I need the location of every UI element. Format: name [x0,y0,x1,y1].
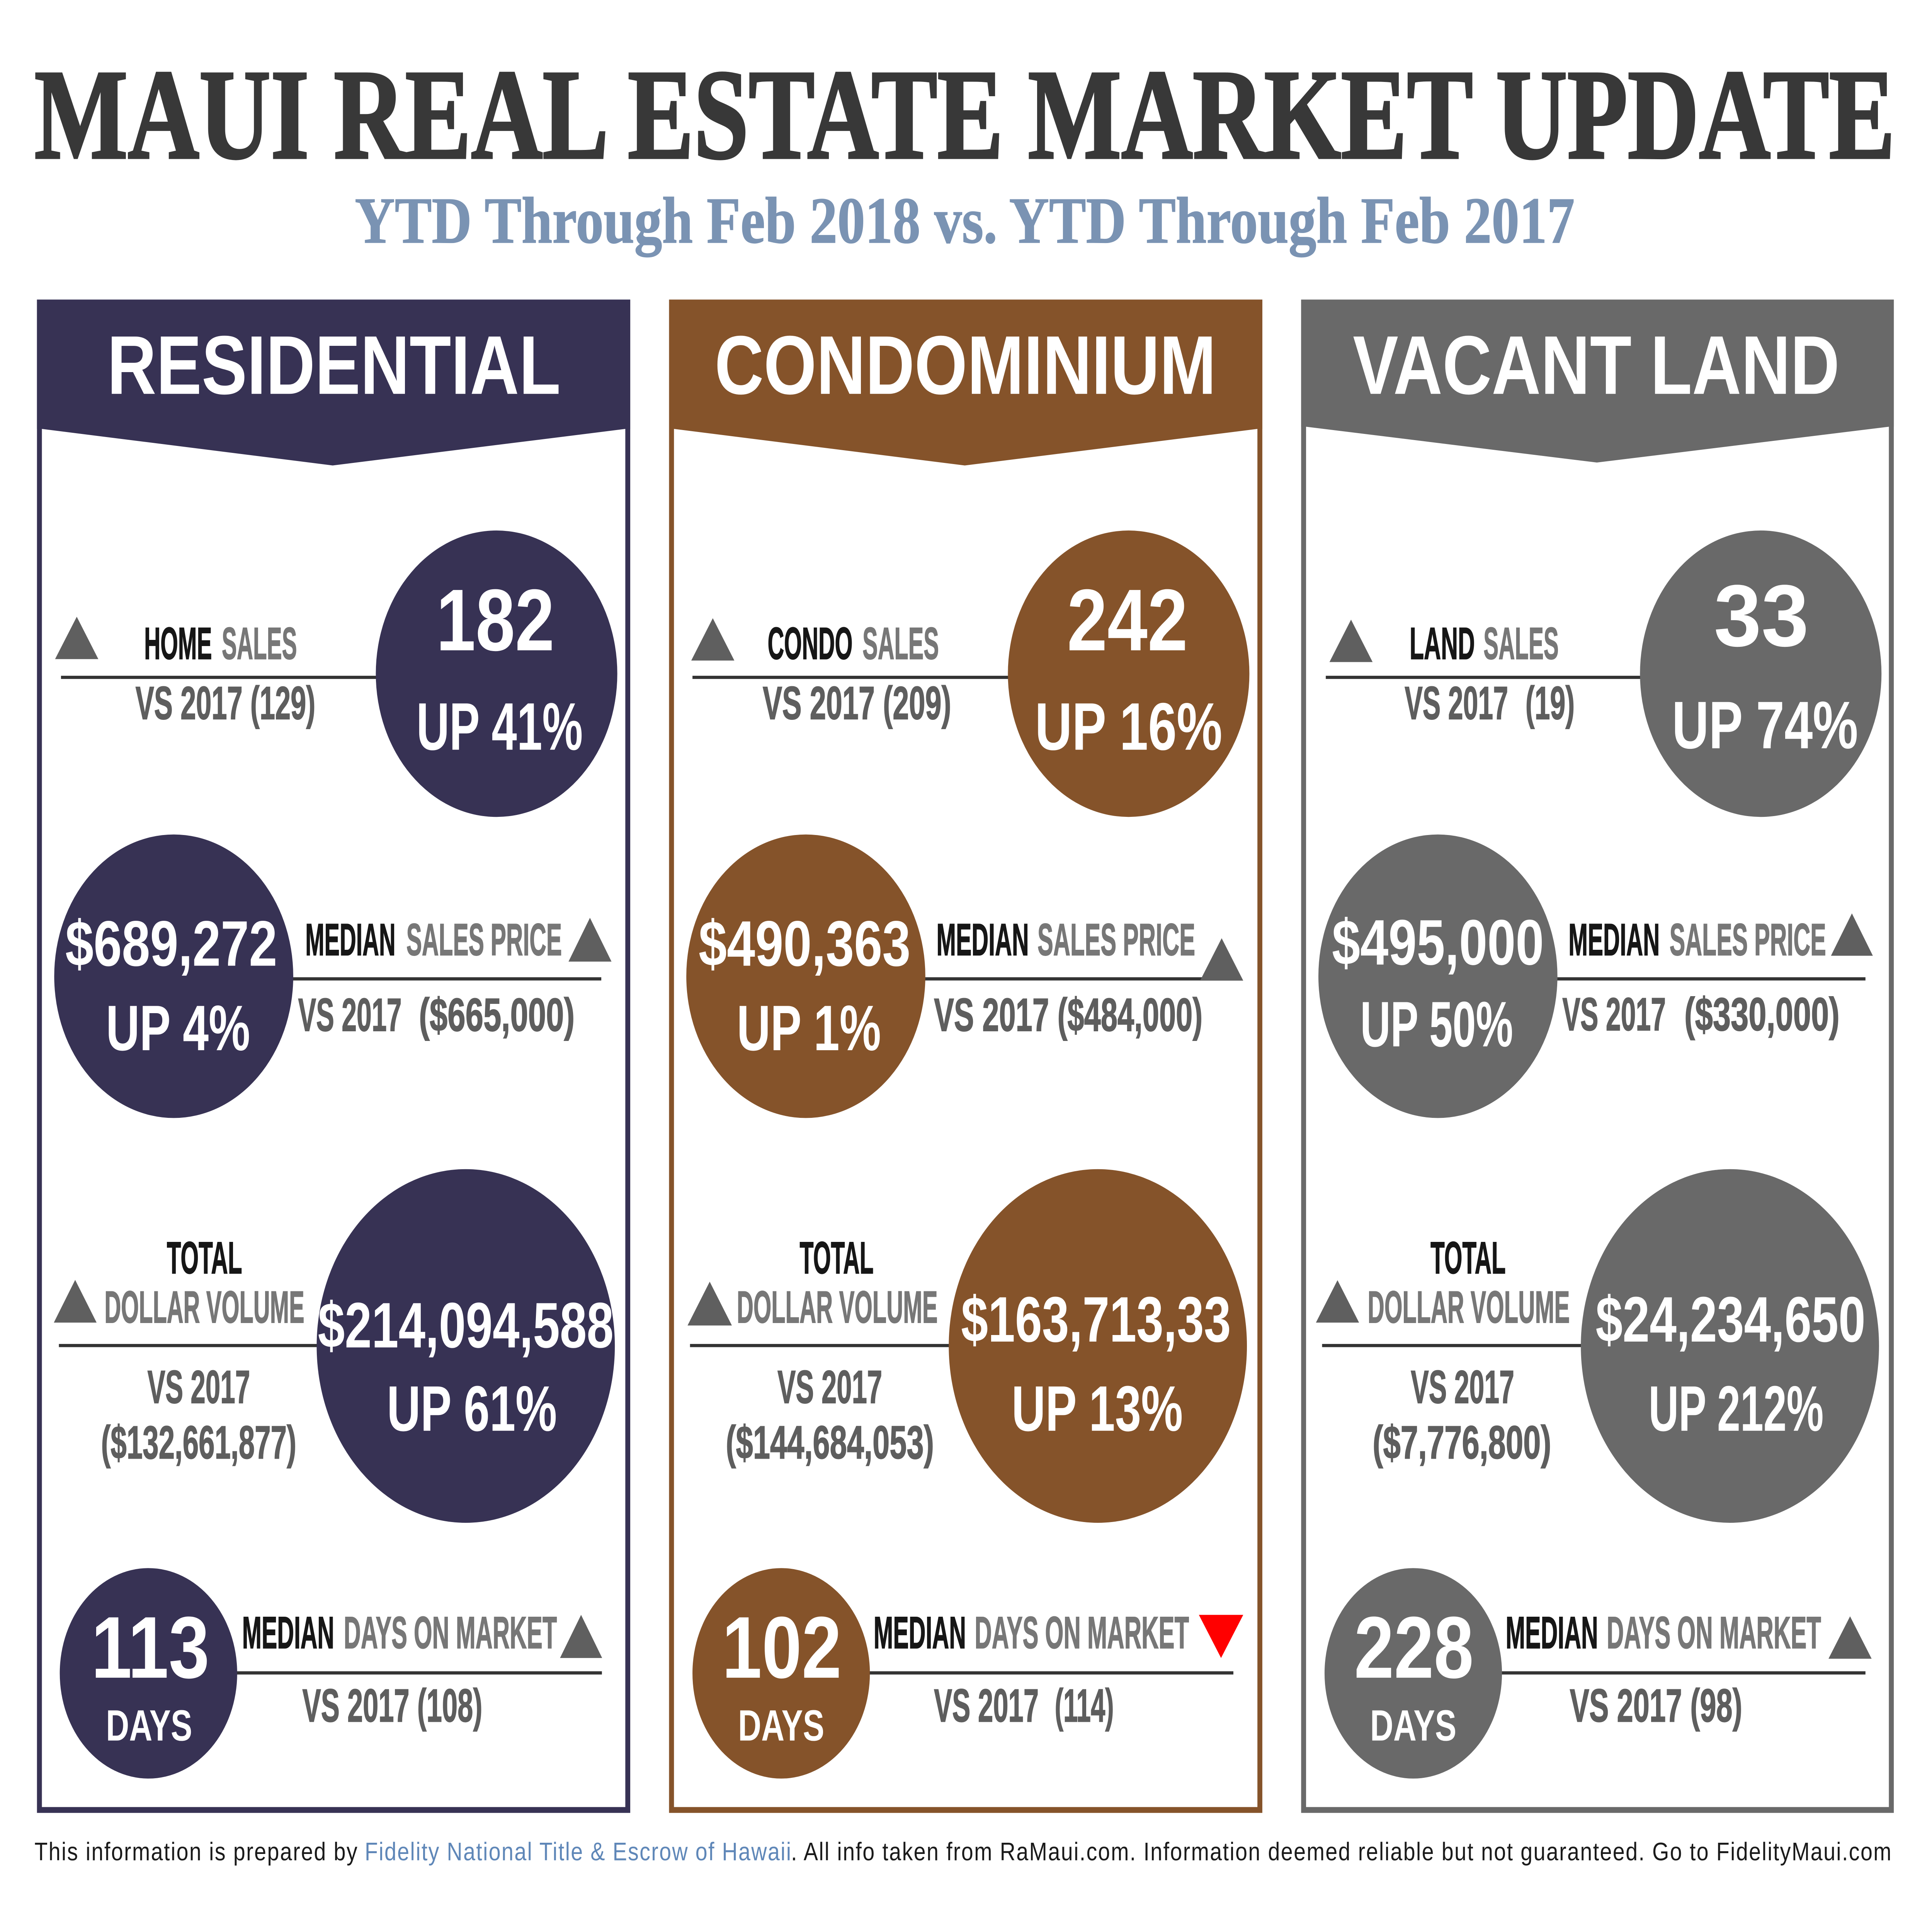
home sales label: SALES [222,618,297,669]
condo sales comparison: VS 2017 (209) [763,677,951,729]
land sales comparison: VS 2017 [1405,677,1508,729]
circle: condo sales [1008,531,1249,817]
home sales label: HOME [144,618,212,669]
circle: total dollar volume: $163,713,33 [961,1284,1231,1355]
total dollar volume label [1368,1232,1570,1332]
dollar volume comparison: VS 2017 [1411,1361,1514,1413]
days on market comparison: VS 2017 (98) [1570,1679,1742,1731]
circle: median sales price: UP 1% [737,992,881,1064]
subtitle: YTD Through Feb 2018 vs. YTD Through Feb 2017 [355,185,1575,257]
days on market comparison: VS 2017 [934,1679,1039,1731]
circle: home sales: UP 41% [417,689,583,764]
icon: up triangle [1200,938,1243,981]
icon: up triangle [687,1282,732,1325]
vacant land header banner [1301,299,1894,463]
median sales price label [1568,914,1826,965]
total dollar volume label: DOLLAR VOLUME [737,1282,938,1332]
days on market comparison: VS 2017 (108) [303,1679,482,1731]
median price comparison [1562,988,1840,1040]
stat: land sales [1326,531,1881,817]
residential heading: RESIDENTIAL [107,319,561,412]
circle: median sales price [54,835,293,1118]
circle: total dollar volume [1581,1169,1879,1523]
circle: land sales [1640,531,1881,817]
condo sales label: SALES [862,618,939,669]
stat: median sales price [1318,835,1873,1118]
median days on market label [874,1607,1189,1658]
circle: days on market: DAYS [106,1701,192,1750]
circle: median sales price: UP 50% [1360,988,1513,1060]
circle: median sales price: $490,363 [699,908,911,980]
stat: median sales price [686,835,1243,1118]
median sales price label: MEDIAN [305,914,396,965]
circle: total dollar volume: $214,094,588 [318,1289,614,1361]
median price comparison: VS 2017 [1562,988,1666,1040]
vacant land heading: VACANT LAND [1353,319,1840,412]
circle: days on market: 228 [1354,1599,1474,1697]
footer note: Fidelity National Title & Escrow of Hawaii [365,1837,791,1866]
circle: days on market: DAYS [738,1701,824,1750]
icon: up triangle [1330,620,1372,662]
panel: vacant land [1301,299,1894,1810]
total dollar volume label [104,1232,304,1332]
median sales price label: MEDIAN [936,914,1029,965]
stat: total dollar volume [687,1169,1247,1523]
icon: up triangle [568,918,612,962]
dollar volume comparison: VS 2017 [148,1361,250,1413]
icon: up triangle [54,1280,97,1323]
footer note [34,1837,1891,1866]
icon: up triangle [1831,913,1873,956]
circle: condo sales: 242 [1067,571,1188,669]
stat: median days on market [692,1568,1243,1779]
median days on market label [1506,1607,1821,1658]
median days on market label: MEDIAN [874,1607,966,1658]
circle: total dollar volume: UP 13% [1012,1372,1183,1444]
icon: up triangle [1316,1280,1359,1323]
days on market comparison: (114) [1055,1679,1114,1731]
stat: median sales price [54,835,612,1118]
median price comparison: ($665,000) [419,989,575,1041]
circle: days on market [1325,1568,1502,1779]
circle: days on market: 102 [722,1599,842,1697]
median days on market label: DAYS ON MARKET [344,1607,557,1658]
stat: median days on market [60,1568,602,1779]
dollar volume comparison [101,1361,296,1469]
footer note: This information is prepared by [34,1837,357,1866]
residential header banner [37,299,630,466]
median days on market label: DAYS ON MARKET [975,1607,1189,1658]
total dollar volume label: TOTAL [1430,1232,1506,1283]
dollar volume comparison: ($144,684,053) [726,1416,934,1469]
median sales price label: SALES PRICE [406,914,562,965]
icon: up triangle [560,1615,602,1658]
dollar volume comparison: VS 2017 [777,1361,882,1413]
total dollar volume label [737,1232,938,1332]
median price comparison [298,989,575,1041]
circle: days on market: DAYS [1370,1701,1456,1750]
stat: condo sales [691,531,1249,817]
circle: median sales price: UP 4% [106,992,250,1064]
circle: days on market [692,1568,870,1779]
stat: total dollar volume [54,1169,615,1523]
circle: median sales price [686,835,925,1118]
condominium heading: CONDOMINIUM [714,319,1216,412]
land sales comparison: (19) [1526,677,1575,729]
circle: land sales: 33 [1714,567,1809,665]
circle: total dollar volume [949,1169,1247,1523]
dollar volume comparison [726,1361,934,1469]
circle: total dollar volume: UP 212% [1649,1372,1823,1444]
circle: condo sales: UP 16% [1035,689,1222,764]
median sales price label: SALES PRICE [1037,914,1195,965]
median sales price label: SALES PRICE [1670,914,1826,965]
icon: up triangle [691,618,735,661]
total dollar volume label: TOTAL [800,1232,874,1283]
circle: median sales price [1318,835,1558,1118]
icon: up triangle [55,617,98,659]
condo sales label: CONDO [768,618,853,669]
stat: home sales [55,531,617,817]
panel: residential [37,299,630,1810]
total dollar volume label: DOLLAR VOLUME [1368,1282,1570,1332]
circle: total dollar volume: UP 61% [387,1372,557,1444]
land sales label: SALES [1483,618,1559,669]
stat: total dollar volume [1316,1169,1879,1523]
footer note: . All info taken from RaMaui.com. Information deemed reliable but not guaranteed. Go to FidelityMaui.com [791,1837,1891,1866]
median days on market label: MEDIAN [1506,1607,1598,1658]
median sales price label: MEDIAN [1568,914,1660,965]
circle: land sales: UP 74% [1672,688,1858,763]
circle: median sales price: $689,272 [65,908,277,980]
circle: home sales [376,531,617,817]
panel: condominium [669,299,1262,1810]
total dollar volume label: DOLLAR VOLUME [104,1282,304,1332]
land sales label: LAND [1410,618,1475,669]
median sales price label [305,914,562,965]
median price comparison: VS 2017 [298,989,402,1041]
median sales price label [936,914,1195,965]
circle: total dollar volume [317,1169,615,1523]
condominium header banner [669,299,1262,466]
dollar volume comparison: ($7,776,800) [1372,1416,1551,1469]
circle: days on market: 113 [91,1599,209,1697]
stat: median days on market [1325,1568,1872,1779]
circle: home sales: 182 [436,571,554,669]
median days on market label: MEDIAN [242,1607,334,1658]
dollar volume comparison [1372,1361,1551,1469]
circle: median sales price: $495,000 [1332,906,1544,978]
median price comparison: VS 2017 ($484,000) [934,989,1202,1041]
dollar volume comparison: ($132,661,877) [101,1416,296,1469]
median days on market label [242,1607,557,1658]
icon: down triangle [1199,1615,1243,1658]
total dollar volume label: TOTAL [167,1232,242,1283]
circle: total dollar volume: $24,234,650 [1595,1284,1866,1355]
icon: up triangle [1828,1616,1872,1659]
home sales comparison: VS 2017 (129) [136,677,315,729]
median price comparison: ($330,000) [1684,988,1840,1040]
circle: days on market [60,1568,237,1779]
